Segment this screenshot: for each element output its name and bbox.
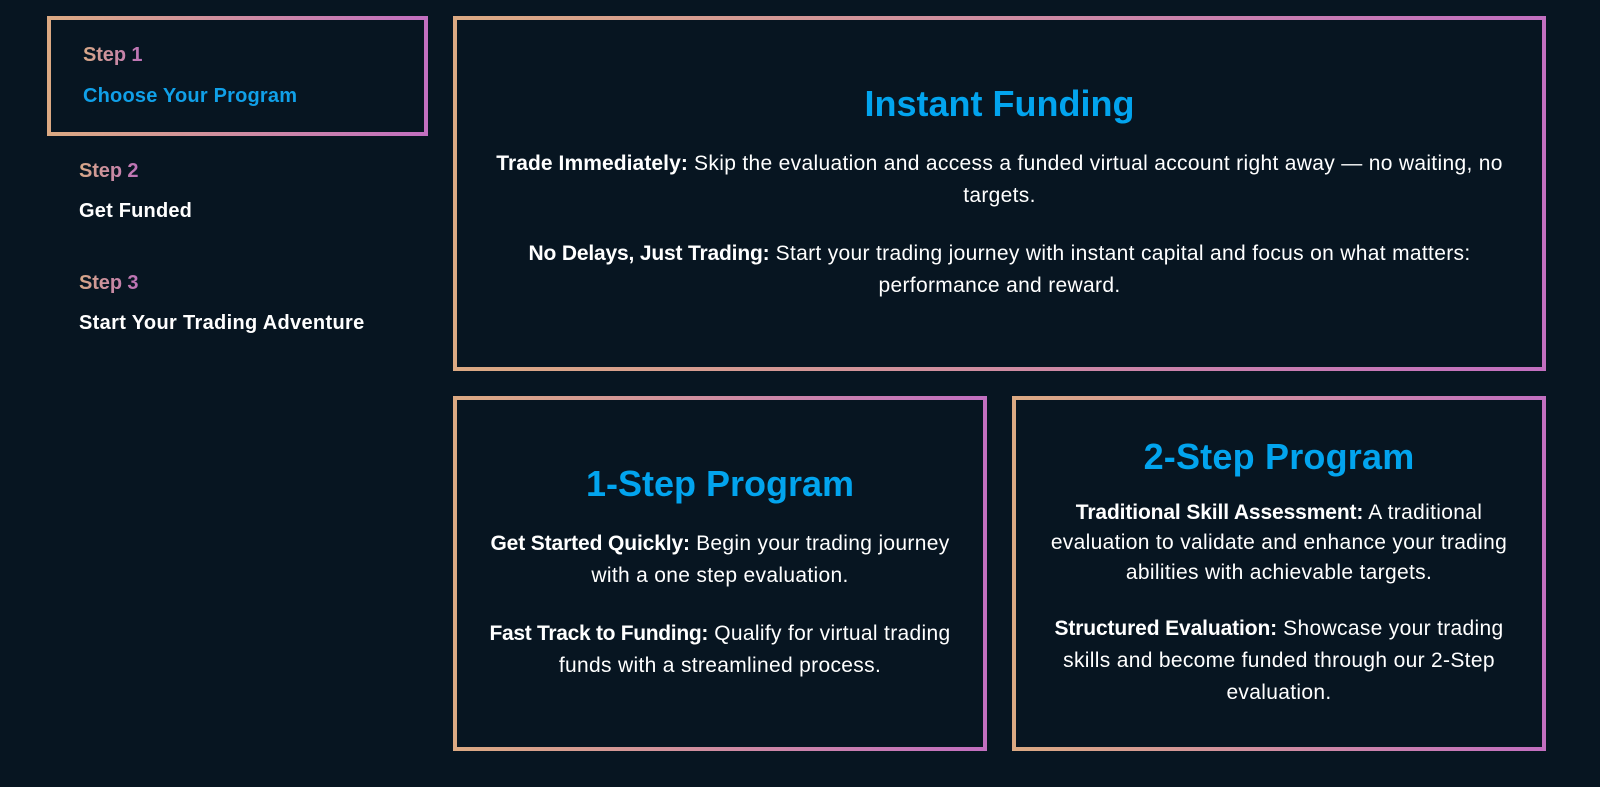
panel: 1-Step Program bbox=[453, 396, 987, 751]
text: No Delays: No Delays, Just Trading: Start your trading journey with instant capital and focus on what matters: bbox=[528, 242, 1470, 265]
text: Structured Evaluation bbox=[1054, 617, 1504, 704]
panel: step 1 highlighted bbox=[47, 16, 428, 136]
text: Structured Evaluation: Structured Evaluation: Showcase your trading bbox=[1054, 617, 1504, 640]
text: Traditional Skill Assessment bbox=[1051, 501, 1507, 584]
panel: Instant Funding bbox=[453, 16, 1546, 371]
text: Get Started Quickly: with a one step evaluation. bbox=[591, 564, 849, 587]
text: Trade Immediately bbox=[496, 152, 1503, 207]
text: Trade Immediately: Trade Immediately: Skip the evaluation and access a funded virtual account right away — no waiting, no bbox=[496, 152, 1503, 175]
text: Traditional Skill Assessment: evaluation to validate and enhance your trading bbox=[1051, 531, 1507, 554]
step 3 title: Start Your Trading Adventure bbox=[79, 312, 365, 334]
text: Traditional Skill Assessment: abilities with achievable targets. bbox=[1126, 561, 1432, 584]
heading: 2-Step Program: 2-Step Program bbox=[1144, 436, 1414, 477]
text: Get Started Quickly bbox=[490, 532, 950, 587]
step 2 title: Get Funded bbox=[79, 200, 192, 222]
text: Fast Track to Funding: Fast Track to Funding: Qualify for virtual trading bbox=[490, 622, 950, 645]
panel: 2-Step Program bbox=[1012, 396, 1546, 751]
text: Fast Track to Funding: funds with a streamlined process. bbox=[559, 654, 881, 677]
text: Trade Immediately: targets. bbox=[963, 184, 1036, 207]
step 1 title: Choose Your Program bbox=[83, 85, 297, 107]
text: No Delays bbox=[528, 242, 1470, 297]
heading: Instant Funding: Instant Funding bbox=[865, 83, 1134, 124]
text: Structured Evaluation: evaluation. bbox=[1226, 681, 1332, 704]
text: Structured Evaluation: skills and become funded through our 2-Step bbox=[1063, 649, 1495, 672]
step 1 label: Step 1 bbox=[83, 44, 142, 66]
step 3 label: Step 3 bbox=[79, 272, 138, 294]
text: Fast Track to Funding bbox=[490, 622, 950, 677]
text: Traditional Skill Assessment: Traditional Skill Assessment: A traditional bbox=[1076, 501, 1482, 524]
heading: 1-Step Program: 1-Step Program bbox=[586, 463, 854, 504]
step 2 label: Step 2 bbox=[79, 160, 138, 182]
text: No Delays: performance and reward. bbox=[878, 274, 1120, 297]
text: Get Started Quickly: Get Started Quickly: Begin your trading journey bbox=[490, 532, 950, 555]
